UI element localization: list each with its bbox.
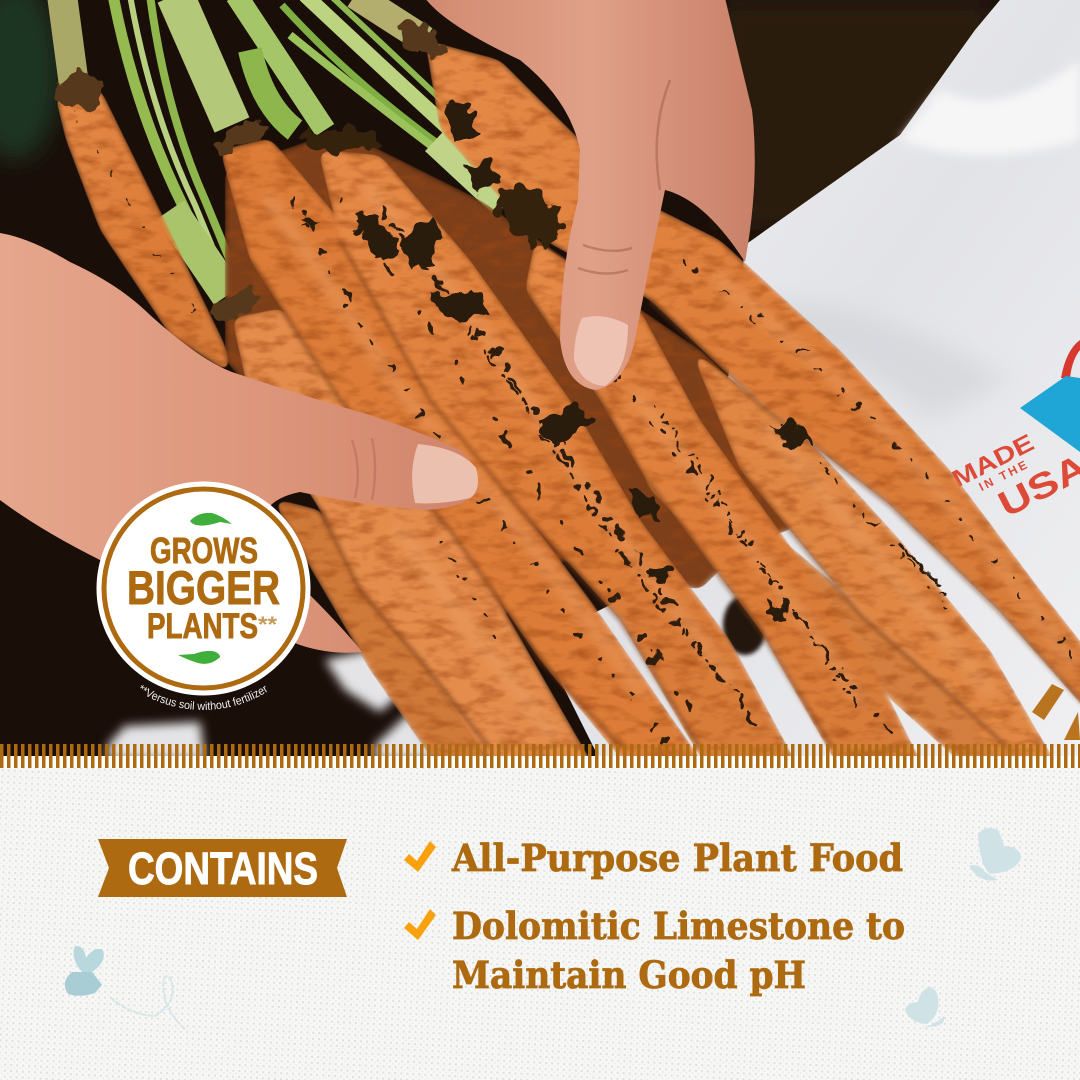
carrot far left, upper <box>55 88 232 375</box>
carrots group <box>55 40 1080 770</box>
white ground patches <box>108 650 440 760</box>
badge text: grows: GROWS <box>150 530 258 571</box>
bag logo: blue shape <box>1020 376 1080 452</box>
ribbon text: CONTAINS <box>128 843 318 894</box>
item text <box>452 904 905 997</box>
contains ribbon <box>98 839 347 897</box>
icon: check <box>404 909 436 940</box>
thumb crease <box>352 438 375 500</box>
fabric panel <box>0 756 1080 1080</box>
list item 2 <box>404 904 905 997</box>
item text: All-Purpose Plant Food <box>451 836 903 880</box>
icon: bee left <box>65 946 186 1030</box>
carrot shading <box>250 240 1080 748</box>
icon: butterfly right <box>969 828 1021 881</box>
badge text: plants: PLANTS <box>147 607 258 646</box>
stitched stripe border <box>0 756 1080 768</box>
right hand <box>425 0 755 390</box>
icon: bottom leaf <box>178 651 220 664</box>
icon: check <box>404 841 436 872</box>
icon: butterfly lower right <box>905 987 944 1028</box>
left hand <box>0 233 478 653</box>
rear carrot <box>620 420 1012 762</box>
carrot 5 <box>525 240 925 770</box>
badge disc <box>96 482 310 696</box>
carrot crowns <box>50 12 571 328</box>
blurred foliage top left <box>0 0 60 160</box>
bee flight trail <box>110 976 186 1030</box>
green tops <box>62 0 510 295</box>
finger creases <box>578 80 670 274</box>
item text: Maintain Good pH <box>452 953 806 997</box>
soil top right <box>720 0 990 230</box>
icon: top leaf <box>190 513 232 526</box>
bag text <box>948 412 1080 539</box>
carrot mass underlay <box>225 130 860 640</box>
list item 1 <box>404 836 903 880</box>
fingernail <box>574 316 628 386</box>
badge ring <box>104 489 303 688</box>
thumb nail <box>412 444 478 503</box>
carrot far left, lower <box>272 498 490 770</box>
white fertilizer bag <box>540 0 1080 760</box>
carrot top right <box>425 40 1080 720</box>
footnote: **Versus soil without fertilizer <box>140 685 267 710</box>
photo: hands holding carrots <box>0 0 1080 770</box>
bag text: MADE <box>948 429 1038 493</box>
item text: Dolomitic Limestone to <box>452 904 905 948</box>
carrot 3 <box>220 138 708 770</box>
bag text: USA <box>991 445 1080 525</box>
soil clump <box>723 595 767 655</box>
carrot highlights <box>270 190 1070 730</box>
large soil blotches <box>300 100 812 620</box>
carrot 2 <box>232 308 596 770</box>
soil speckles on carrots <box>80 120 1080 745</box>
bag bottom mark <box>1032 684 1080 740</box>
bag text: IN THE <box>977 458 1029 494</box>
bag logo: red arc <box>1061 340 1080 378</box>
badge text: bigger: BIGGER <box>127 561 280 614</box>
soil background <box>0 0 1080 760</box>
badge asterisks: ** <box>258 612 277 637</box>
badge: grows bigger plants <box>96 482 310 696</box>
carrot 6 <box>690 348 1060 770</box>
carrot 4 <box>318 150 800 770</box>
